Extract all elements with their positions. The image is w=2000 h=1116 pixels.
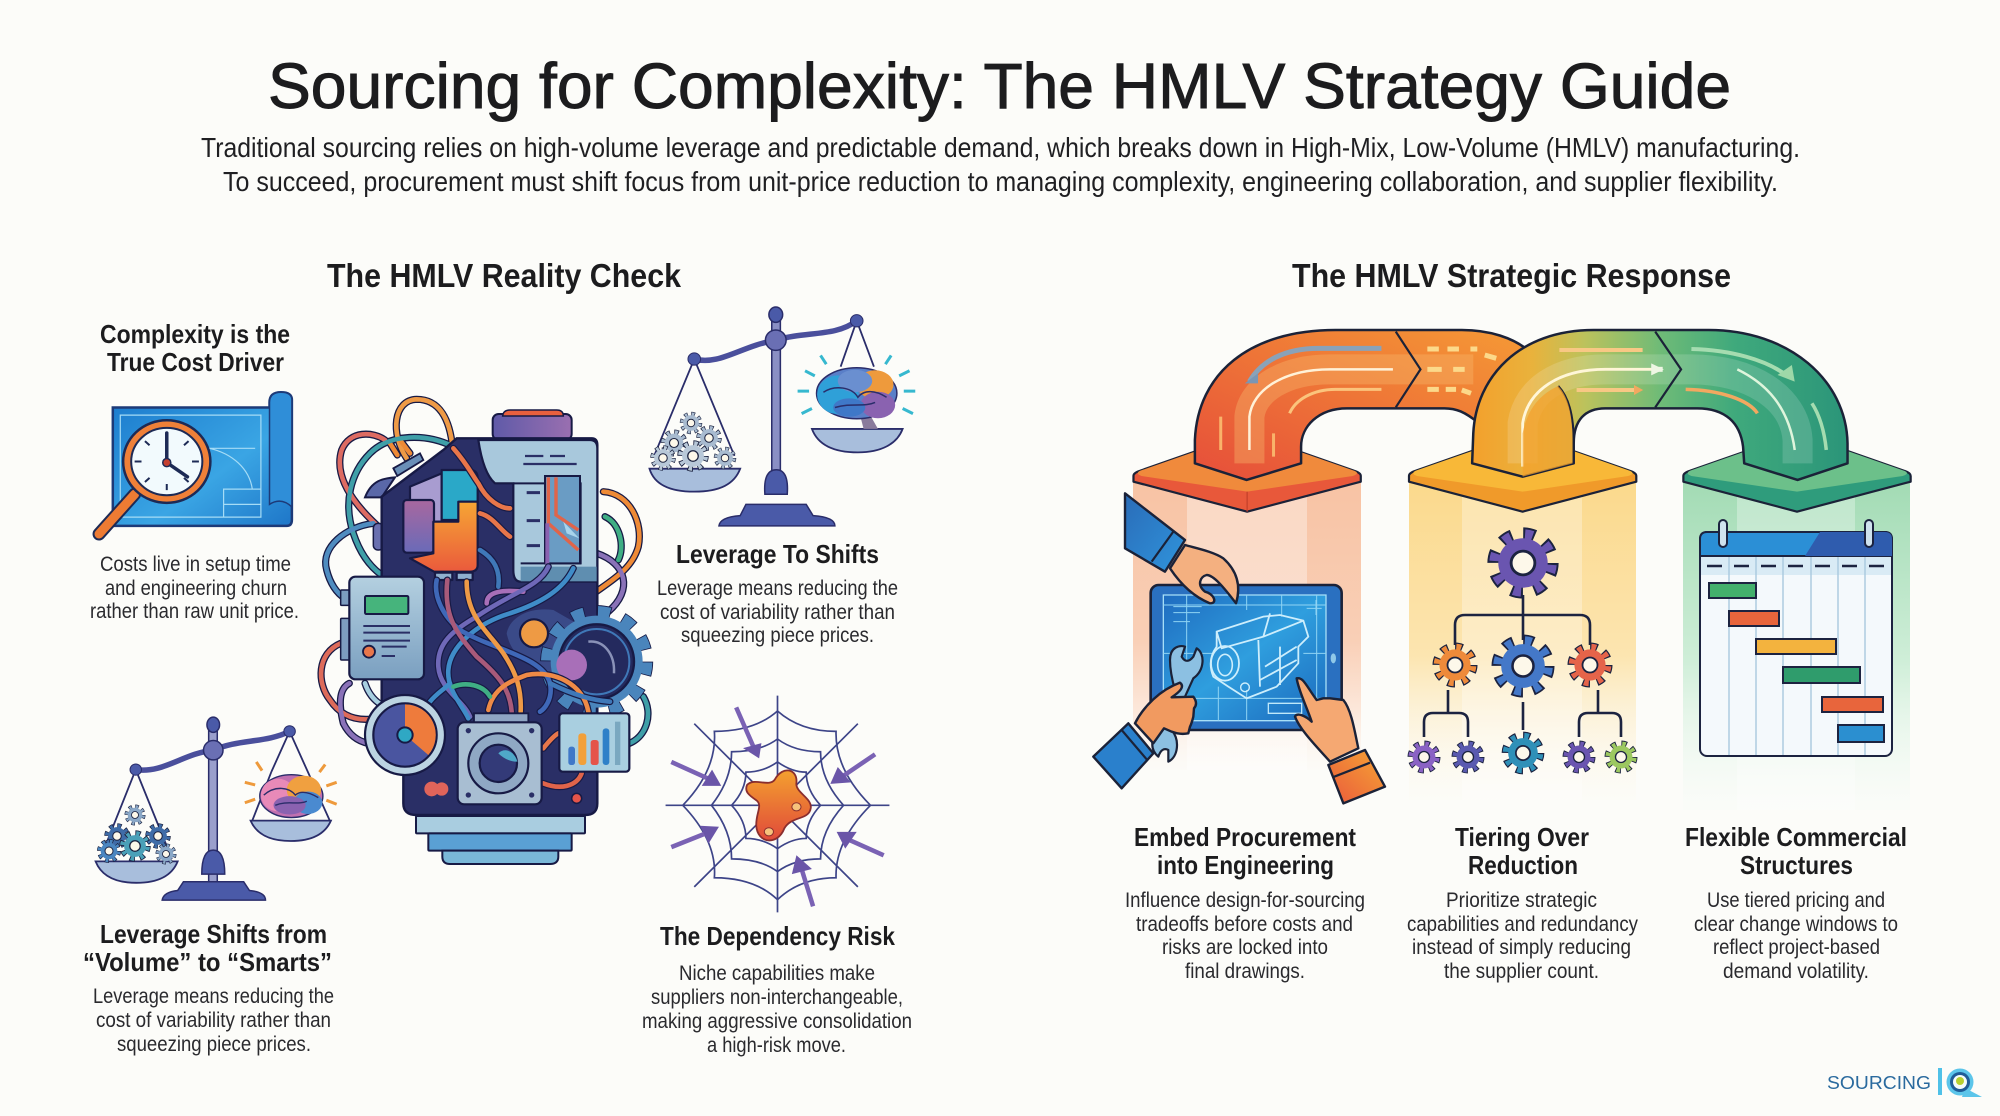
- body text: Use tiered pricing and: [1707, 889, 1885, 912]
- org tree of gears: [1411, 534, 1634, 770]
- icon: balance scale with heavy gears: [96, 717, 337, 900]
- platform 2: [1409, 433, 1636, 512]
- body text: [1125, 889, 1365, 983]
- right hand: [1295, 678, 1358, 762]
- body text: Leverage means reducing the: [657, 577, 898, 600]
- diagram: connected pipes and platforms: [1133, 330, 1911, 512]
- outer wires: [321, 399, 648, 743]
- top hand: [1170, 545, 1238, 603]
- step: flexible commercial structures: [1685, 822, 1907, 983]
- motor blueprint: [1211, 613, 1308, 698]
- outer wire outlines: [321, 399, 648, 743]
- subtitle: [201, 132, 1800, 197]
- heading: reality check: The HMLV Reality Check: [327, 257, 682, 294]
- body text: [90, 553, 299, 623]
- heading: Leverage To Shifts: [676, 539, 879, 569]
- heading: [100, 319, 290, 377]
- body text: [93, 985, 334, 1056]
- body text: cost of variability rather than: [660, 601, 895, 624]
- column backgrounds: [1133, 480, 1910, 810]
- body text: reflect project-based: [1713, 936, 1880, 959]
- body text: the supplier count.: [1444, 960, 1599, 983]
- top right panel: [478, 440, 597, 582]
- panel: complexity is the true cost driver: [90, 319, 299, 623]
- body text: instead of simply reducing: [1412, 936, 1631, 959]
- heading: Tiering Over: [1455, 822, 1589, 852]
- left hand: [1135, 683, 1196, 743]
- body text: making aggressive consolidation: [642, 1010, 912, 1033]
- step: embed procurement: [1125, 822, 1365, 983]
- platform 1: [1133, 433, 1361, 512]
- body text: [642, 962, 912, 1057]
- wrench: [1152, 646, 1203, 762]
- heading: The Dependency Risk: [660, 921, 895, 951]
- panel: leverage shifts from volume to smarts: [83, 717, 337, 1056]
- subtitle: Traditional sourcing relies on high-volume leverage and predictable demand, which breaks down in High-Mix, Low-Volume (HMLV) manufacturing.: [201, 132, 1800, 163]
- heading: Complexity is the: [100, 319, 290, 349]
- illustration: tangled engine: [321, 399, 648, 864]
- left sleeve: [1093, 723, 1153, 788]
- body text: tradeoffs before costs and: [1136, 913, 1353, 936]
- heading: [83, 919, 332, 977]
- puzzle block: [403, 470, 478, 580]
- icon: gears on pan: [653, 414, 734, 469]
- chart panel: [559, 713, 629, 772]
- illustration: hands on tablet: [1093, 493, 1385, 803]
- panel: leverage to shifts: [649, 307, 915, 647]
- right sleeve: [1328, 750, 1385, 803]
- heading: [1134, 822, 1356, 880]
- body text: final drawings.: [1185, 960, 1305, 983]
- body text: clear change windows to: [1694, 913, 1898, 936]
- subtitle: To succeed, procurement must shift focus from unit-price reduction to managing complexity, engineering collaboration, and supplier flexibility.: [223, 166, 1778, 197]
- icon: balance scale gears vs brain: [649, 307, 915, 526]
- heading: “Volume” to “Smarts”: [83, 947, 332, 977]
- heading: Embed Procurement: [1134, 822, 1356, 852]
- body text: suppliers non-interchangeable,: [651, 986, 903, 1009]
- heading: Structures: [1740, 850, 1853, 880]
- heading: strategic response: The HMLV Strategic Response: [1292, 257, 1731, 294]
- gauge: [365, 695, 445, 775]
- body text: cost of variability rather than: [96, 1009, 331, 1032]
- body text: Niche capabilities make: [679, 962, 875, 985]
- internal wires: [430, 448, 610, 787]
- step: tiering over reduction: [1407, 822, 1638, 983]
- connector: [393, 453, 423, 476]
- body text: risks are locked into: [1162, 936, 1328, 959]
- body text: demand volatility.: [1723, 960, 1869, 983]
- body text: [657, 577, 898, 647]
- body text: Prioritize strategic: [1446, 889, 1597, 912]
- pipe 1: [1195, 330, 1528, 480]
- icon: blueprint with magnifying clock: [99, 392, 292, 534]
- body text: capabilities and redundancy: [1407, 913, 1638, 936]
- heading: [1455, 822, 1589, 880]
- body text: Leverage means reducing the: [93, 985, 334, 1008]
- left instrument panel: [341, 590, 350, 605]
- panel: the dependency risk: [642, 696, 912, 1057]
- heading: True Cost Driver: [107, 347, 284, 377]
- body text: Costs live in setup time: [100, 553, 291, 576]
- heading: Reduction: [1468, 850, 1578, 880]
- logo: sourcing iq: SOURCING: [1827, 1072, 1931, 1093]
- body text: a high-risk move.: [707, 1034, 846, 1057]
- title: Sourcing for Complexity: The HMLV Strategy Guide: [268, 50, 1731, 122]
- logo: sourcing iq: [1827, 1068, 1982, 1097]
- heading: into Engineering: [1157, 850, 1334, 880]
- big gear: [547, 612, 647, 712]
- gantt calendar: [1700, 520, 1892, 756]
- top sleeve: [1125, 493, 1185, 572]
- engine body: [365, 477, 395, 497]
- pipe 2: [1472, 330, 1848, 480]
- body text: squeezing piece prices.: [681, 624, 874, 647]
- tablet: [1151, 585, 1342, 730]
- heading: Leverage Shifts from: [100, 919, 327, 949]
- body text: rather than raw unit price.: [90, 600, 299, 623]
- icon: gear pile: [99, 807, 174, 862]
- heading: [1685, 822, 1907, 880]
- body text: and engineering churn: [105, 577, 287, 600]
- internal wire outlines: [430, 448, 610, 787]
- camera module: [474, 713, 528, 723]
- body text: [1407, 889, 1638, 983]
- body text: [1694, 889, 1898, 983]
- body text: Influence design-for-sourcing: [1125, 889, 1365, 912]
- heading: Flexible Commercial: [1685, 822, 1907, 852]
- icon: spider web with blob: [666, 696, 889, 912]
- platform 3: [1683, 433, 1911, 512]
- body text: squeezing piece prices.: [117, 1033, 311, 1056]
